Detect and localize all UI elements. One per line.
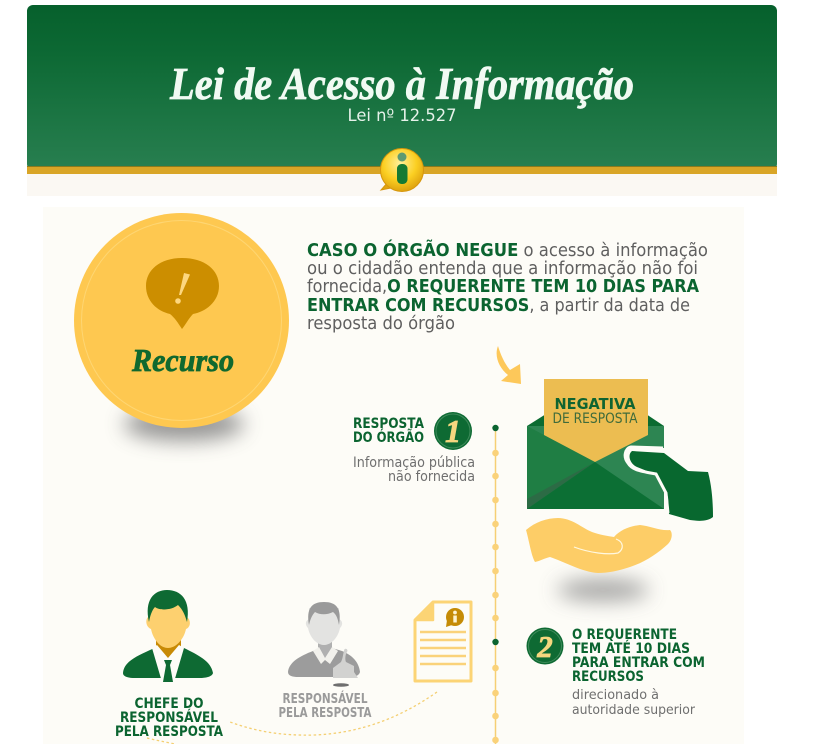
chief label: RESPONSÁVEL	[120, 709, 218, 726]
intro text block	[307, 238, 708, 334]
intro text block: CASO O ÓRGÃO NEGUE o acesso à informação	[307, 238, 708, 261]
icon: yellow open hand	[526, 518, 672, 601]
step 2 label: autoridade superior	[572, 702, 695, 718]
illustration: envelope	[527, 379, 664, 509]
icon: information speech bubble	[380, 148, 424, 192]
step 2 label: PARA ENTRAR COM	[572, 655, 705, 671]
subtitle: Lei nº 12.527	[348, 106, 456, 126]
responsible label: RESPONSÁVEL	[282, 691, 368, 707]
icon: alert speech bubble	[146, 258, 219, 329]
step 2 label: RECURSOS	[572, 669, 644, 685]
step 1 number badge: 1	[445, 413, 461, 449]
icon: chief person	[123, 590, 213, 682]
letter: NEGATIVA	[554, 395, 636, 413]
chief label	[115, 696, 223, 740]
step 2 label: TEM ATÉ 10 DIAS	[572, 640, 690, 657]
step 1 label: Informação pública	[353, 455, 475, 471]
icon: responsible person with stamp	[288, 602, 360, 687]
step 1 label: não fornecida	[388, 469, 475, 485]
step 2 label	[572, 627, 705, 718]
badge label: Recurso	[131, 342, 234, 378]
step 1 label: RESPOSTA	[353, 416, 425, 432]
header banner	[27, 5, 777, 196]
dotted connector between steps	[147, 692, 437, 744]
icon: document with info bubble	[415, 602, 471, 681]
chief label: PELA RESPOSTA	[115, 724, 223, 740]
timeline	[492, 425, 499, 744]
panel: recurso badge	[74, 213, 289, 441]
intro text block: ou o cidadão entenda que a informação não foi	[307, 259, 698, 279]
title: Lei de Acesso à Informação	[169, 59, 634, 109]
step 2 number badge: 2	[536, 629, 553, 664]
letter: DE RESPOSTA	[552, 411, 638, 427]
intro text block: resposta do órgão	[307, 314, 455, 334]
letter	[544, 379, 648, 462]
responsible label: PELA RESPOSTA	[278, 706, 372, 721]
step 1 label: DO ÓRGÃO	[353, 428, 424, 446]
intro text block: ENTRAR COM RECURSOS, a partir da data de	[307, 296, 690, 316]
intro text block: fornecida,O REQUERENTE TEM 10 DIAS PARA	[307, 277, 699, 297]
step 2 label: direcionado à	[572, 687, 659, 703]
main panel	[43, 207, 744, 744]
arrow: curved yellow	[497, 346, 521, 384]
chief label: CHEFE DO	[134, 696, 204, 712]
responsible label	[278, 691, 372, 721]
step 1 number badge	[434, 412, 472, 450]
step 1 label	[353, 416, 475, 485]
step 2 number badge	[526, 628, 564, 664]
icon: green hand holding envelope	[625, 447, 713, 521]
step 2 label: O REQUERENTE	[572, 627, 677, 643]
